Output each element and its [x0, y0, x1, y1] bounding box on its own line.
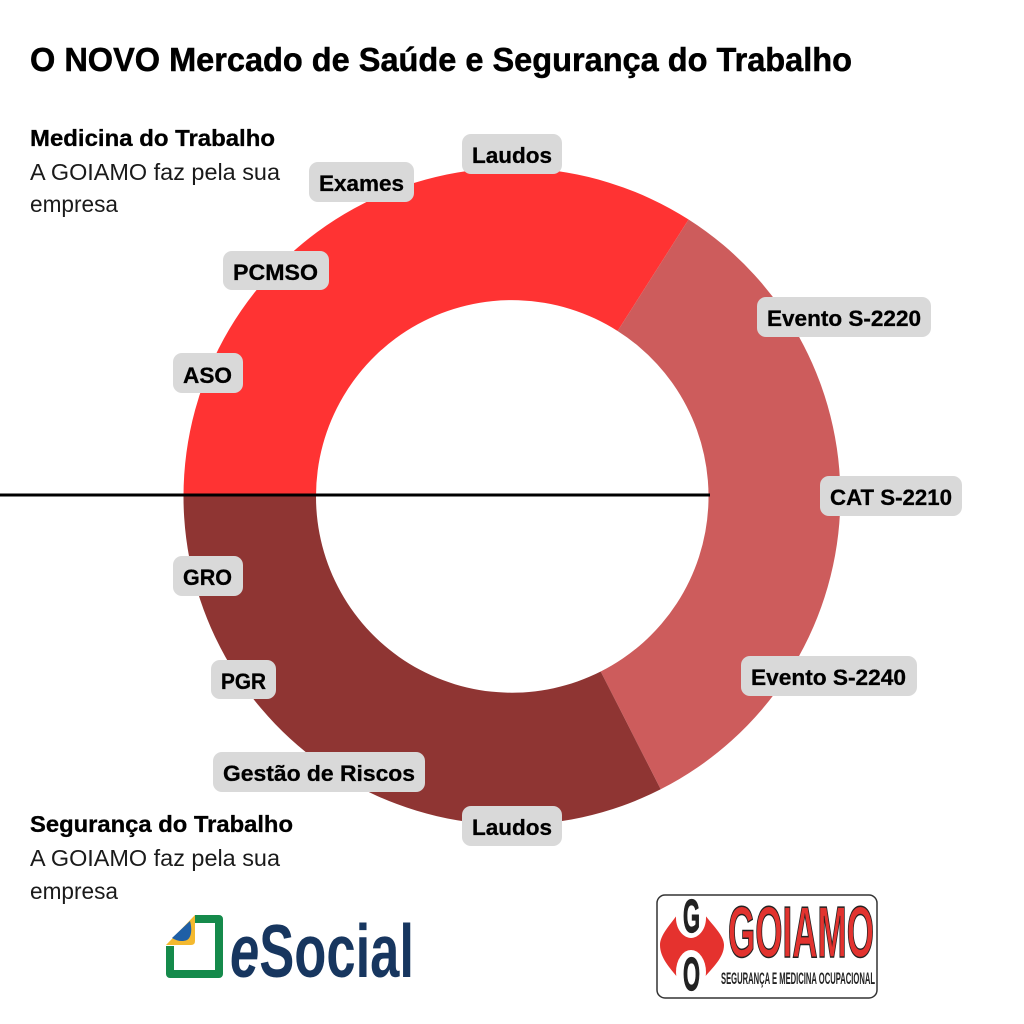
label: ASO	[173, 353, 243, 393]
label: PGR: PGR	[221, 669, 266, 694]
label: Evento S-2240	[741, 656, 917, 696]
label: GRO	[173, 556, 243, 596]
divider line	[0, 494, 710, 496]
label: CAT S-2210: CAT S-2210	[830, 485, 952, 510]
text block: Medicina do Trabalho	[30, 125, 280, 217]
label: Evento S-2220	[757, 297, 931, 337]
label: PCMSO: PCMSO	[233, 260, 318, 285]
text block: Segurança do Trabalho: empresa	[30, 878, 118, 904]
label: Evento S-2220: Evento S-2220	[767, 306, 921, 331]
segment: Segurança do Trabalho	[184, 496, 661, 825]
donut chart	[184, 168, 840, 825]
label: Laudos bottom: Laudos	[472, 815, 552, 840]
label: Laudos bottom	[462, 806, 562, 846]
title: O NOVO Mercado de Saúde e Segurança do Trabalho	[30, 41, 852, 78]
label: ASO: ASO	[183, 363, 232, 388]
label: PCMSO	[223, 251, 329, 290]
segment: eSocial events	[601, 220, 840, 789]
text block: Medicina do Trabalho: Medicina do Trabalho	[30, 125, 275, 151]
label: PGR	[211, 660, 276, 699]
label: GRO: GRO	[183, 565, 232, 590]
logo: eSocial	[166, 909, 414, 993]
text block: Segurança do Trabalho: Segurança do Trabalho	[30, 811, 293, 837]
label: Gestão de Riscos: Gestão de Riscos	[223, 761, 415, 786]
logo frame	[657, 895, 877, 998]
label: Exames: Exames	[319, 171, 404, 196]
logo: GOIAMO: O	[683, 948, 700, 1000]
text block: Segurança do Trabalho	[30, 811, 293, 904]
segment: Medicina do Trabalho	[184, 168, 689, 496]
label: Laudos top: Laudos	[472, 143, 552, 168]
label: Evento S-2240: Evento S-2240	[751, 665, 906, 690]
text block: Medicina do Trabalho: empresa	[30, 191, 118, 217]
logo: GOIAMO: G	[683, 890, 700, 942]
label: Gestão de Riscos	[213, 752, 425, 792]
label: CAT S-2210	[820, 476, 962, 516]
label: Exames	[309, 162, 414, 202]
logo: GOIAMO	[657, 890, 877, 1000]
text block: Segurança do Trabalho: A GOIAMO faz pela sua	[30, 845, 280, 871]
icon: GOIAMO red emblem	[660, 896, 724, 994]
icon: eSocial document	[166, 915, 219, 974]
logo: GOIAMO: GOIAMO	[728, 893, 874, 973]
label: Laudos top	[462, 134, 562, 174]
logo: eSocial: eSocial	[230, 909, 414, 993]
text block: Medicina do Trabalho: A GOIAMO faz pela sua	[30, 159, 280, 185]
